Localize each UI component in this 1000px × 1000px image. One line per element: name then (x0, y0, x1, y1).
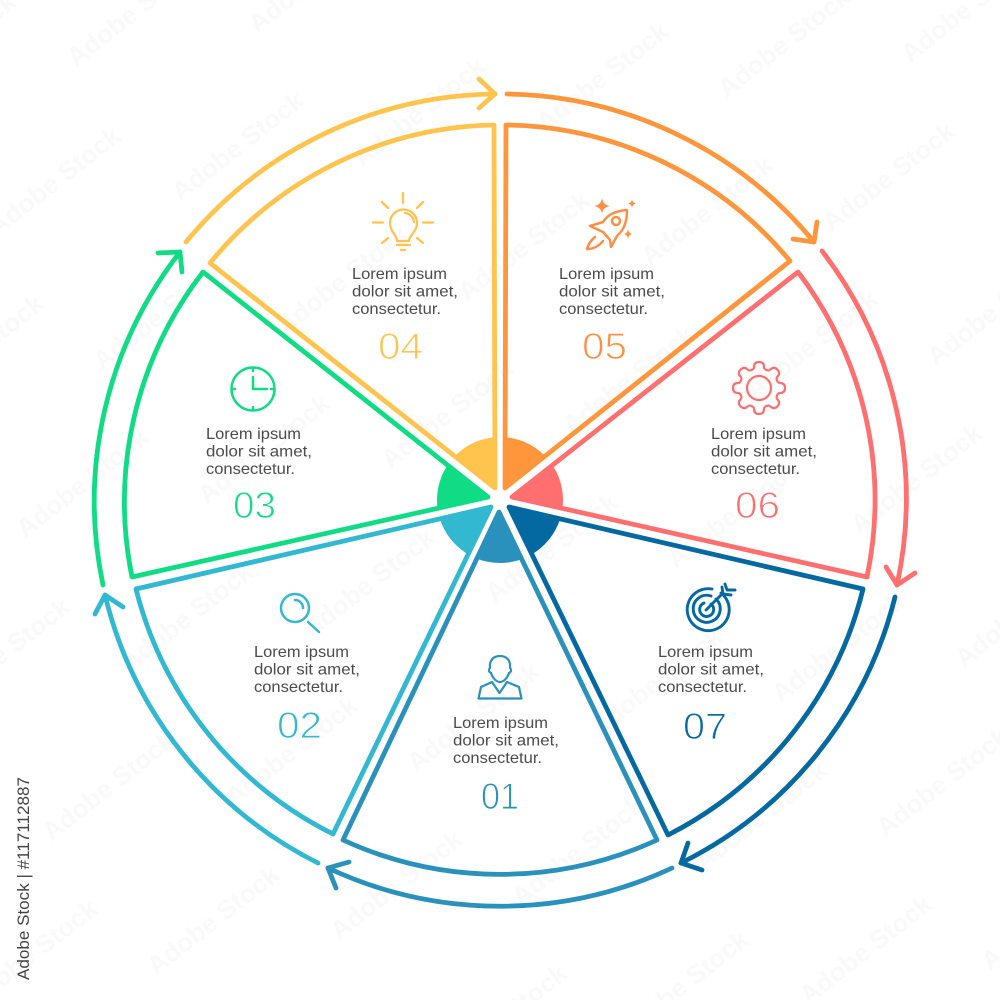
text block 07: consectetur. (658, 679, 747, 696)
text block 03: dolor sit amet, (206, 444, 312, 460)
text block 02: Lorem ipsum (254, 644, 349, 661)
text block 07: Lorem ipsum (658, 644, 753, 661)
sector outline 03 (124, 272, 488, 577)
arrow: 07 to 01 (681, 597, 895, 870)
text block 03: consectetur. (206, 461, 295, 478)
text block 02: consectetur. (254, 679, 343, 696)
sector outline 01 (343, 512, 657, 874)
hub wedge 03 (437, 467, 482, 506)
panel: sector 03 (124, 272, 488, 577)
sector outline 07 (509, 507, 863, 835)
sector outline 02 (136, 507, 491, 834)
hub wedge 01 (479, 518, 520, 563)
sector outline 04 (210, 125, 495, 488)
hub wedge 04 (456, 438, 493, 483)
stock id label: Adobe Stock | #117112887 (14, 777, 33, 980)
arrow: 02 to 03 (95, 595, 318, 863)
panel: sector 01 (343, 512, 657, 874)
arrow: 01 to 02 (328, 862, 672, 906)
number 07: 07 (683, 706, 727, 747)
sector outline 06 (512, 272, 875, 577)
text block 04: dolor sit amet, (352, 284, 458, 300)
text block 03: Lorem ipsum (206, 426, 301, 443)
panel: sector 05 (505, 125, 790, 488)
arrow: 06 to 07 (822, 251, 915, 585)
arrow: 04 to 05 (186, 79, 495, 242)
hub wedge 05 (507, 438, 544, 483)
icon: target (687, 584, 735, 631)
panel: sector 04 (210, 125, 495, 488)
text block 01: Lorem ipsum (453, 715, 548, 732)
number 01: 01 (481, 776, 519, 817)
text block 04: consectetur. (352, 301, 441, 318)
arrow: 03 to 04 (94, 252, 182, 585)
arrow: 05 to 06 (507, 94, 817, 242)
hub wedge 07 (514, 510, 560, 553)
text block 02: dolor sit amet, (254, 662, 360, 678)
text block 06: dolor sit amet, (711, 444, 817, 460)
text block 06: consectetur. (711, 461, 800, 478)
sector outline 05 (505, 125, 790, 488)
panel: sector 06 (512, 272, 875, 577)
text block 05: consectetur. (559, 301, 648, 318)
text block 06: Lorem ipsum (711, 426, 806, 443)
number 06: 06 (735, 485, 780, 526)
icon: rocket sparkles (594, 198, 636, 239)
number 03: 03 (233, 485, 276, 526)
text block 01: consectetur. (453, 750, 542, 767)
text block 01: dolor sit amet, (453, 732, 559, 750)
hub wedge 06 (518, 467, 563, 506)
icon: magnifier (281, 594, 319, 632)
panel: sector 07 (509, 507, 863, 835)
number 05: 05 (582, 326, 627, 367)
number 02: 02 (277, 705, 322, 746)
icon: person (478, 656, 522, 698)
icon: gear (733, 362, 785, 414)
icon: light bulb (373, 193, 433, 250)
text block 07: dolor sit amet, (658, 662, 764, 678)
panel: sector 02 (136, 507, 491, 834)
icon: rocket (587, 210, 627, 249)
text block 05: Lorem ipsum (559, 266, 654, 283)
number 04: 04 (378, 326, 423, 367)
text block 04: Lorem ipsum (352, 266, 447, 283)
hub wedge 02 (440, 510, 486, 553)
icon: clock (232, 368, 274, 410)
text block 05: dolor sit amet, (559, 284, 665, 300)
